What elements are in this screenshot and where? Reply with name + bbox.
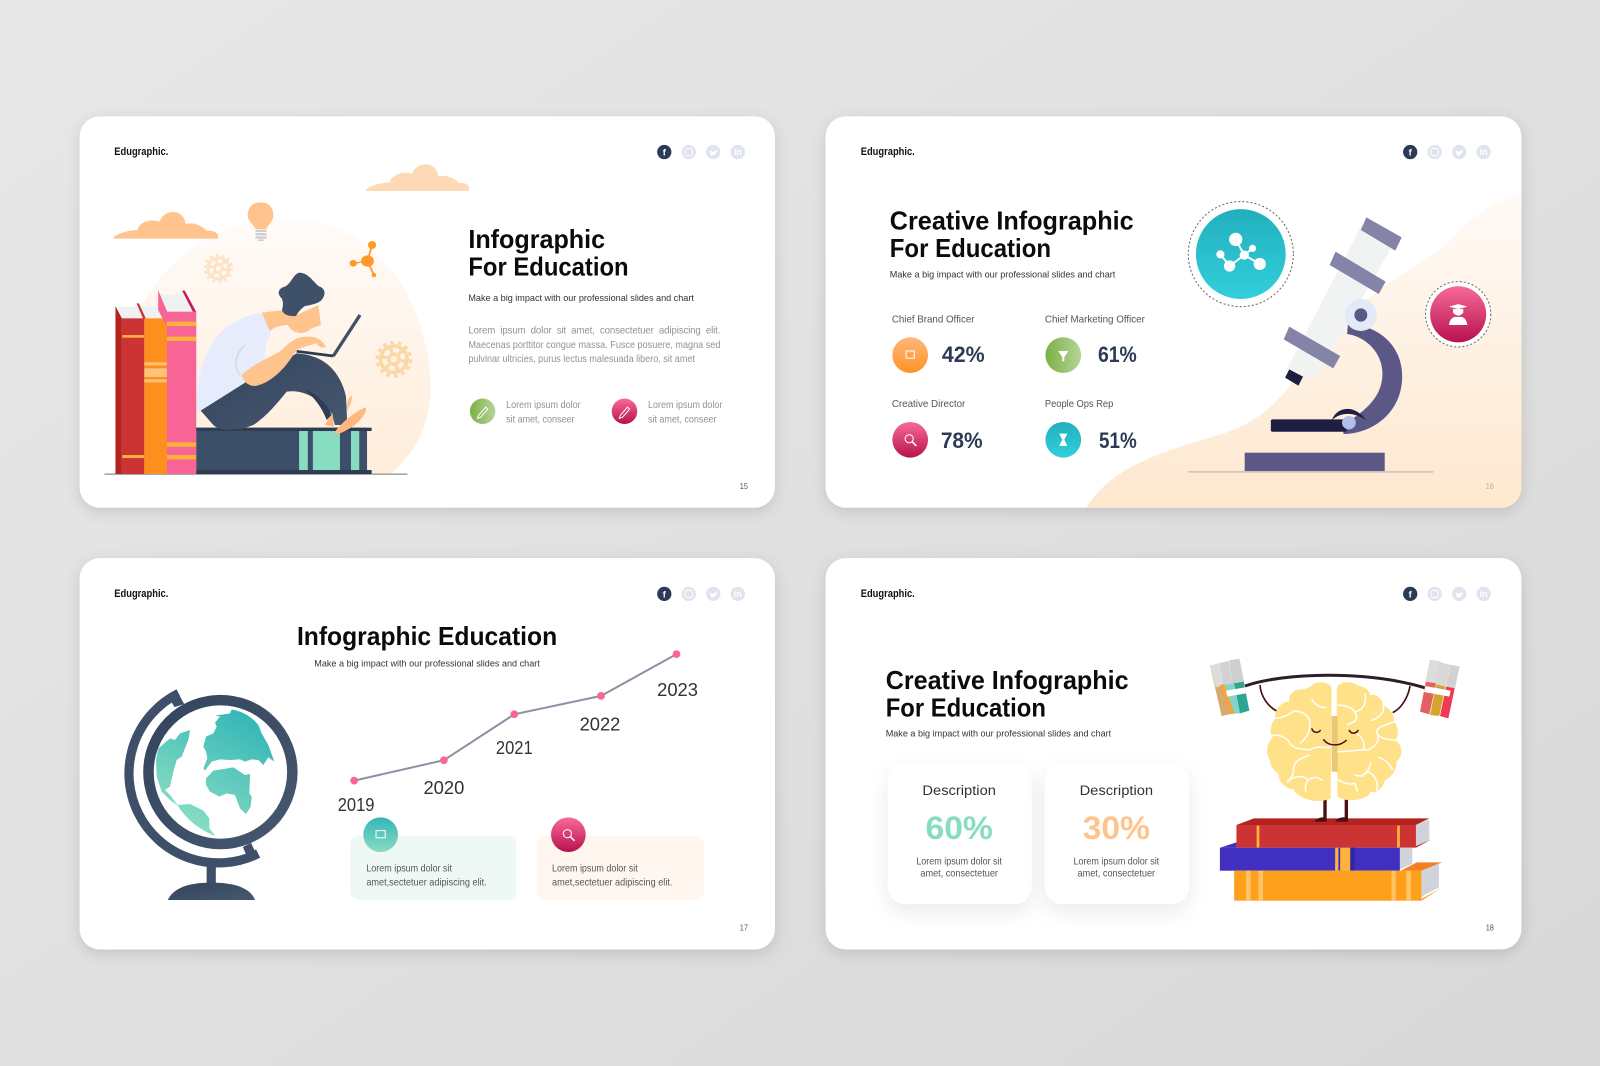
microscope joint <box>1345 299 1377 331</box>
card: 30 percent: 30% <box>1083 809 1150 846</box>
card: 30 percent <box>1045 763 1189 904</box>
right weights <box>1420 660 1459 718</box>
social icons: f <box>663 589 667 599</box>
heading: Creative Infographic <box>890 208 1134 236</box>
heading: For Education <box>890 235 1051 263</box>
cloud top <box>365 164 469 191</box>
card: 60 percent: Lorem ipsum dolor sit <box>916 856 1002 867</box>
stat: chief marketing officer <box>1045 314 1145 373</box>
icon: graduate circle <box>1426 282 1491 347</box>
stat: creative director: 78% <box>941 428 983 453</box>
card: 60 percent <box>888 763 1032 904</box>
stat: people ops rep: 51% <box>1099 428 1137 453</box>
callout: green: Lorem ipsum dolor sit <box>366 863 452 874</box>
microscope tube <box>1284 217 1402 386</box>
ground line <box>104 473 407 475</box>
microscope base <box>1245 453 1385 472</box>
page number: 15 <box>740 481 748 491</box>
brain arms <box>1260 685 1410 713</box>
card: 60 percent: 60% <box>926 809 993 846</box>
logo: Edugraphic. <box>861 588 915 600</box>
social icons: in <box>734 589 742 599</box>
dark book seat <box>196 428 372 474</box>
page number: 17 <box>740 923 748 933</box>
social icons: in <box>1480 589 1488 599</box>
callout: green: amet,sectetuer adipiscing elit. <box>366 878 487 889</box>
brain legs <box>1314 798 1348 822</box>
icon: light bulb <box>248 202 273 241</box>
heading: Creative Infographic <box>886 667 1129 695</box>
orange book <box>137 303 167 474</box>
social icons <box>1403 145 1491 159</box>
heading <box>886 667 1129 722</box>
feature: pink pencil <box>612 398 723 425</box>
illustration: globe <box>129 690 292 900</box>
stat: chief marketing officer: Chief Marketing Officer <box>1045 314 1145 325</box>
feature: pink pencil: sit amet, conseer <box>648 414 717 425</box>
panel: slide 17 infographic education <box>80 558 775 949</box>
stat: people ops rep <box>1045 399 1137 458</box>
feature: green pencil: Lorem ipsum dolor <box>506 400 581 411</box>
stat: chief marketing officer: 61% <box>1098 342 1137 367</box>
line chart: years: 2020 <box>423 777 464 798</box>
page number: 16 <box>1486 481 1494 491</box>
logo: Edugraphic. <box>861 146 915 158</box>
panel: slide 16 creative infographic <box>826 116 1522 508</box>
icon: molecule <box>351 242 375 277</box>
book stack <box>1220 818 1442 901</box>
illustration: student on books <box>104 164 469 475</box>
page number: 18 <box>1486 923 1494 933</box>
background blob <box>1086 193 1522 508</box>
callout: peach <box>537 817 704 900</box>
stat: chief brand officer: Chief Brand Officer <box>892 314 975 325</box>
subheading: Make a big impact with our professional slides and chart <box>886 729 1112 739</box>
brain <box>1267 682 1401 801</box>
gear icons <box>205 255 411 376</box>
illustration: microscope <box>1086 193 1522 508</box>
social icons: in <box>734 147 742 157</box>
body text: Lorem ipsum dolor sit amet, consectetuer adipiscing elit. <box>468 326 720 337</box>
cloud left <box>113 212 218 239</box>
stat: chief brand officer <box>892 314 985 373</box>
heading <box>890 208 1134 263</box>
microscope stage <box>1271 409 1366 432</box>
stat: people ops rep: People Ops Rep <box>1045 399 1114 410</box>
stat: creative director: Creative Director <box>892 399 966 410</box>
line chart: years: 2021 <box>496 737 533 758</box>
heading <box>468 226 629 282</box>
callout: peach: Lorem ipsum dolor sit <box>552 863 638 874</box>
stat: chief brand officer: 42% <box>942 342 985 367</box>
student figure <box>197 273 366 434</box>
social icons: f <box>1409 148 1413 158</box>
card: 30 percent: Description <box>1080 783 1153 799</box>
feature: green pencil <box>470 398 581 425</box>
globe continents <box>156 709 274 836</box>
social icons <box>1403 587 1491 601</box>
subheading: Make a big impact with our professional slides and chart <box>468 293 694 303</box>
card: 30 percent: amet, consectetuer <box>1078 869 1156 880</box>
icon: molecule circle <box>1188 202 1293 307</box>
stat: creative director <box>892 399 983 458</box>
feature: pink pencil: Lorem ipsum dolor <box>648 400 723 411</box>
background blob <box>134 218 431 474</box>
orange book <box>1234 862 1442 901</box>
microscope arm <box>1343 323 1402 434</box>
line chart: years: 2023 <box>657 679 698 700</box>
social icons <box>657 145 745 159</box>
heading: For Education <box>468 254 629 282</box>
logo: Edugraphic. <box>114 146 168 158</box>
brain figure <box>1210 659 1459 822</box>
panel: slide 18 creative infographic <box>826 558 1521 949</box>
card: 60 percent: Description <box>922 783 996 799</box>
subheading: Make a big impact with our professional slides and chart <box>314 658 540 668</box>
barbell bar <box>1245 675 1427 688</box>
illustration: brain lifting weights on books <box>1210 659 1459 901</box>
body text: pulvinar ultricies, purus lectus malesuada libero, sit amet <box>468 354 695 365</box>
line chart: years: 2019 <box>338 794 374 815</box>
subheading: Make a big impact with our professional slides and chart <box>890 270 1116 280</box>
logo: Edugraphic. <box>114 588 168 600</box>
body text <box>468 326 720 365</box>
feature: green pencil: sit amet, conseer <box>506 414 575 425</box>
left weights <box>1210 659 1249 716</box>
body text: Maecenas porttitor congue massa. Fusce posuere, magna sed <box>468 340 720 351</box>
social icons <box>657 587 745 601</box>
social icons: f <box>1409 589 1413 599</box>
callout: peach: amet,sectetuer adipiscing elit. <box>552 878 672 889</box>
heading: For Education <box>886 694 1046 722</box>
card: 60 percent: amet, consectetuer <box>920 869 999 880</box>
panel: slide 15 infographic for education <box>80 116 775 508</box>
scene: blob, clouds, bulb, books <box>104 164 469 475</box>
social icons: in <box>1480 147 1488 157</box>
callout: green <box>350 817 516 900</box>
ground line <box>1188 471 1433 473</box>
red book <box>115 306 144 474</box>
line chart: years <box>338 650 698 815</box>
blue book <box>1220 842 1412 871</box>
card: 30 percent: Lorem ipsum dolor sit <box>1073 856 1159 867</box>
heading: Infographic Education <box>297 623 557 651</box>
line chart: years: 2022 <box>580 714 620 735</box>
brain face <box>1312 728 1358 745</box>
red book <box>1236 818 1432 848</box>
heading: Infographic <box>468 226 605 254</box>
social icons: f <box>663 148 667 158</box>
pink book <box>158 290 196 474</box>
